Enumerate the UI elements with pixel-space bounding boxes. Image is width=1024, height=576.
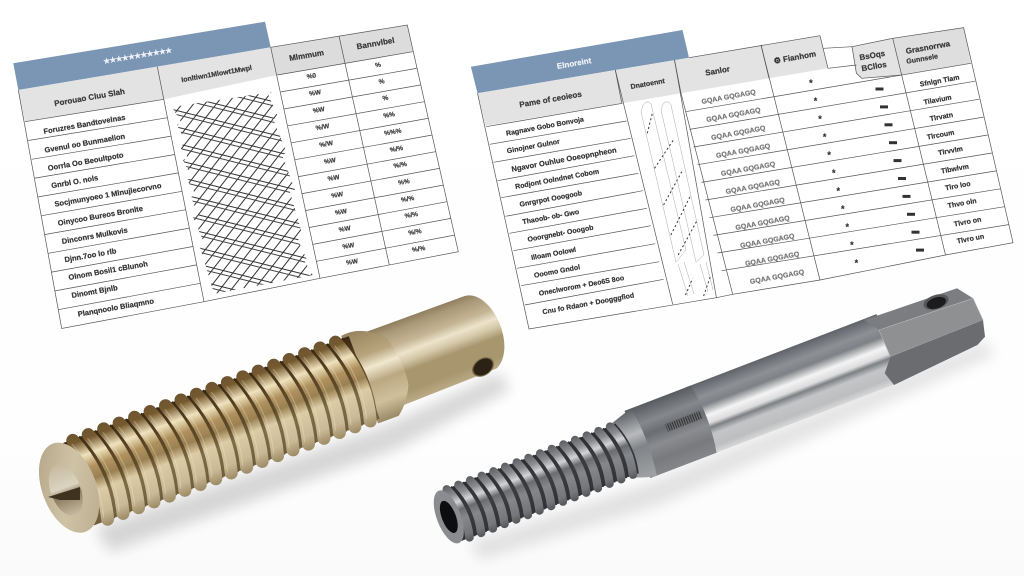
- right table title banner: Elnoreint: [556, 56, 592, 71]
- left table minimum column values: %W: [312, 106, 326, 115]
- right table row labels: Ooomo Gndol: [534, 264, 581, 280]
- right table row labels: Thaoob- ob- Gwo: [522, 209, 580, 226]
- right table sheet: [486, 28, 1013, 329]
- steel hex end: [864, 288, 985, 385]
- left table second column values: %%: [383, 111, 396, 120]
- right table asterisk column: *: [855, 258, 859, 268]
- right table column headers: Dnatoennt: [630, 78, 666, 91]
- right table sensor column values: [701, 89, 805, 286]
- shadow: brass bolt: [95, 372, 510, 552]
- left table minimum column values: %W: [342, 242, 356, 251]
- left table column headers: Bannvlbel: [356, 36, 395, 51]
- brass cross hole: [468, 353, 498, 381]
- right table sensor column values: GQAA GQGAGQ: [716, 143, 771, 160]
- left table column headers: Mlmmum: [288, 48, 325, 63]
- hex cross hole: [921, 291, 951, 313]
- right table grid lines: [478, 28, 1013, 329]
- left table second column values: %/%: [408, 228, 422, 237]
- left table row labels: Dinomt Bjnlb: [71, 283, 119, 300]
- right table asterisk column: *: [823, 132, 827, 142]
- left table row labels: [43, 113, 162, 319]
- right table column headers: Grasnorrwa: [905, 39, 951, 56]
- brass socket bore: [42, 459, 89, 521]
- left table second column values: %/%: [412, 245, 426, 254]
- right table column headers: ⚙ Fianhom: [773, 49, 817, 66]
- right table material column: [919, 74, 985, 245]
- right table asterisk column: *: [818, 114, 822, 124]
- left table row labels: Socjmunyoeo 1 Mlnujlecorvno: [54, 181, 162, 209]
- left table row labels: Oorrla Oo Beoultpoto: [47, 150, 125, 173]
- shadow: steel bolt: [470, 340, 995, 560]
- right table asterisk column: [809, 78, 859, 268]
- right table sensor column values: GQAA GQGAGQ: [745, 251, 801, 268]
- steel bore: [436, 499, 461, 535]
- left table grid lines: [18, 25, 458, 328]
- steel threaded bolt: [425, 314, 902, 555]
- right table row labels: Rodjont Oolndnet Cobom: [515, 169, 600, 191]
- right table material column: Tlvro on: [954, 217, 982, 228]
- steel shank: [685, 314, 902, 455]
- left table sheet: [18, 25, 458, 328]
- left table second column values: %%%: [384, 128, 402, 137]
- right table sensor column values: GQAA GQGAGQ: [725, 179, 781, 196]
- right table column headers: Gunnsele: [906, 53, 939, 66]
- left table second column values: %/%: [404, 211, 419, 220]
- right table sensor column values: GQAA GQGAGQ: [706, 107, 762, 124]
- steel dark collar: [624, 384, 720, 478]
- left table row labels: Oinycoo Bureos Bronlte: [57, 204, 144, 228]
- right table asterisk column: *: [814, 96, 818, 106]
- hex top face: [864, 288, 973, 330]
- right table asterisk column: *: [809, 78, 813, 88]
- left table minimum column values: %W: [331, 191, 345, 200]
- right table material column: Tlrvatn: [929, 112, 954, 123]
- left table second column values: %: [382, 95, 389, 102]
- brass shank: [361, 287, 515, 411]
- left table minimum column values: %W: [327, 174, 341, 183]
- steel thread root: [442, 424, 635, 541]
- right table sensor column values: GQAA GQGAGQ: [701, 89, 757, 106]
- right table asterisk column: *: [827, 150, 831, 160]
- right table dotted thread diagram: [641, 102, 713, 296]
- right table row labels: Ngavor Ouhlue Ooeopnpheon: [511, 145, 618, 174]
- right table column headers: [478, 28, 971, 126]
- left table wire thread diagram: [172, 92, 313, 295]
- right table row labels: Illoam Oolowl: [531, 247, 577, 262]
- right table sensor column values: GQAA GQGAGQ: [730, 197, 786, 214]
- right table asterisk column: *: [850, 240, 854, 250]
- left table minimum column values: %0: [306, 72, 317, 81]
- right table material column: Sfnlgn Tlam: [919, 74, 960, 89]
- left table row labels: Olnom Bosil1 cBlunoh: [68, 259, 149, 282]
- right table row labels: Gnrgrpot Ooogoob: [519, 190, 583, 209]
- steel end face: [428, 486, 470, 547]
- left table row labels: Planqnoolo Bliaqmno: [77, 296, 155, 319]
- right table asterisk column: *: [832, 168, 836, 178]
- left table row labels: Foruzres Bandtovelnas: [43, 113, 126, 136]
- right table row labels: [506, 116, 635, 316]
- brass end face: [27, 434, 111, 541]
- right table column headers: BsOqs: [859, 49, 886, 62]
- brass thread ridges: [71, 336, 380, 523]
- left table minimum column values: [306, 72, 359, 267]
- right table sensor column values: GQAA GQGAGQ: [711, 125, 767, 142]
- left table second column values: [375, 62, 426, 254]
- brass collar: [341, 319, 419, 425]
- left table second column values: %/%: [389, 145, 404, 154]
- right table material column: Tilavium: [923, 95, 952, 107]
- right table material column: Tlro loo: [945, 181, 971, 192]
- brass socket dark wedge: [48, 487, 80, 500]
- left table second column values: %/%: [400, 195, 415, 204]
- brass threaded bolt: [27, 282, 518, 542]
- left table column headers: [18, 25, 413, 122]
- panel: right specification table: [471, 28, 1013, 329]
- right table row labels: Oneclworom + Deo6S 8oo: [538, 275, 625, 298]
- right table material column: Tlbwlvm: [941, 164, 969, 176]
- right table material column: Tlvro un: [956, 234, 985, 245]
- steel thread ridges: [447, 422, 639, 539]
- left table row labels: Dinconrs Mulkovis: [61, 226, 128, 246]
- right table row labels: Ooorgnebt- Ooogob: [527, 225, 594, 244]
- left table column headers: Porouao Cluu Slah: [54, 87, 126, 108]
- right table title banner: [471, 30, 689, 93]
- left table minimum column values: %/W: [315, 123, 331, 132]
- right table column headers: BCllos: [861, 60, 888, 73]
- left table row labels: Gnrbl O. nols: [50, 173, 99, 190]
- left table second column values: %%: [398, 178, 410, 187]
- right table material column: Tlrcoum: [927, 130, 955, 141]
- right table asterisk column: *: [836, 186, 840, 196]
- hex lower face: [885, 320, 985, 385]
- left table title banner: [13, 22, 271, 90]
- right table row labels: Cnu fo Rdaon + Doogggfiod: [542, 292, 635, 316]
- left table minimum column values: %W: [335, 208, 348, 217]
- left table minimum column values: %W: [338, 225, 352, 234]
- right table column headers: Sanlor: [705, 64, 731, 78]
- left table minimum column values: %W: [323, 157, 337, 166]
- left table second column values: %/%: [393, 161, 408, 170]
- right table sensor column values: GQAA GQGAGQ: [749, 269, 805, 286]
- left table row labels: Djnn.7oo lo rlb: [64, 246, 117, 264]
- left table column headers: Ionltiwn1Mlowt1Mwpl: [181, 65, 253, 84]
- engraved marking: [665, 411, 702, 432]
- brass thread root: [63, 336, 380, 525]
- right table dash column: [876, 88, 924, 252]
- panel: left specification table: [13, 22, 458, 328]
- right table asterisk column: *: [846, 222, 850, 232]
- left table minimum column values: %W: [346, 258, 359, 267]
- hex middle face: [879, 298, 983, 357]
- right table asterisk column: *: [841, 204, 845, 214]
- left table second column values: %: [375, 62, 382, 69]
- left table minimum column values: %/W: [319, 140, 334, 149]
- left table title banner: ★★★★★★★★★★★: [103, 46, 173, 66]
- left table minimum column values: %W: [309, 89, 322, 98]
- right table sensor column values: GQAA GQGAGQ: [735, 215, 791, 232]
- steel neck flare: [607, 407, 660, 485]
- right table material column: Tlrvvlm: [938, 146, 964, 157]
- right table sensor column values: GQAA GQGAGQ: [720, 161, 776, 178]
- left table second column values: %: [378, 78, 385, 86]
- left table row labels: Gvenul oo Bunmaelion: [44, 132, 126, 155]
- right table sensor column values: GQAA GQGAGQ: [740, 233, 796, 250]
- right table material column: Thvo oln: [947, 198, 977, 210]
- right table row labels: Ginojner Gulnor: [506, 139, 561, 155]
- right table column headers: Pame of ceoieos: [519, 90, 583, 109]
- right table row labels: Ragnave Gobo Bonvoja: [506, 116, 585, 138]
